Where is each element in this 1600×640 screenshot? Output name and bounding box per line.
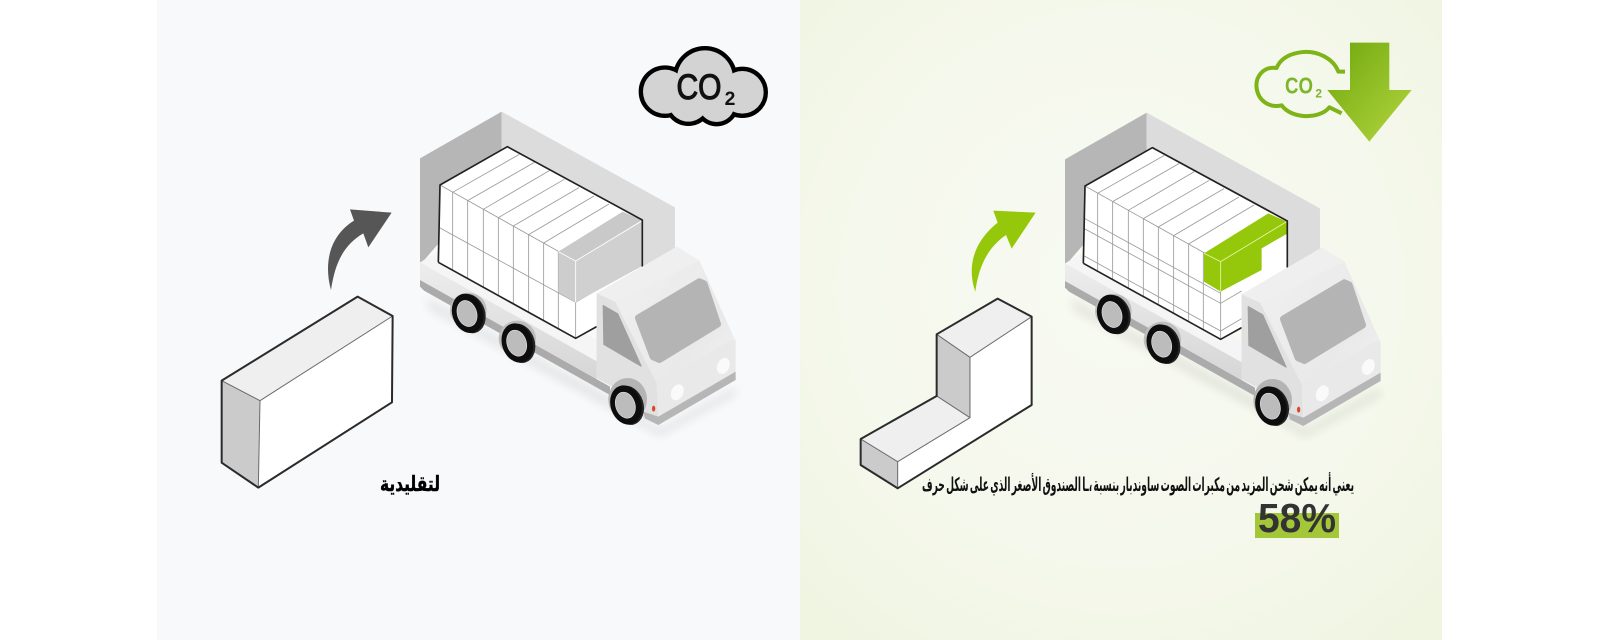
icon: CO2 cloud black: 2 (725, 89, 735, 110)
cargo: boxes with grey box (438, 147, 642, 338)
icon: CO2 reduced with down arrow (1256, 43, 1412, 142)
icon: CO2 cloud black (643, 50, 764, 122)
icon: CO2 reduced with down arrow: CO (1285, 72, 1313, 98)
label: conventional: لتقليدية (380, 472, 440, 496)
truck: L-shaped load (1065, 113, 1382, 438)
panel: conventional background (157, 0, 800, 640)
cargo: boxes with green box (1083, 148, 1287, 339)
arrow: grey curved up (328, 209, 392, 290)
arrow: green curved up (972, 211, 1036, 292)
box: conventional rectangular (222, 297, 393, 488)
panel: L-shaped background (800, 0, 1442, 640)
icon: CO2 cloud black: CO (676, 68, 721, 107)
truck: conventional load (420, 112, 737, 437)
stat: 58 percent: 58% (1258, 495, 1336, 541)
icon: CO2 reduced with down arrow: 2 (1315, 87, 1322, 101)
box: L-shaped (861, 299, 1032, 488)
